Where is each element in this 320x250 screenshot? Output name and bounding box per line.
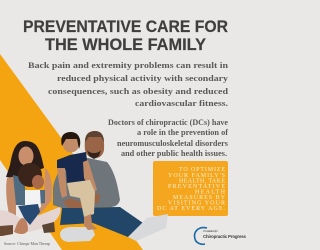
intro paragraph: reduced physical activity with secondary bbox=[57, 73, 229, 83]
intro paragraph: Back pain and extremity problems can result in bbox=[28, 60, 228, 70]
callout box: HEALTH, TAKE bbox=[179, 178, 225, 184]
woman bbox=[0, 141, 61, 236]
family photo bbox=[0, 131, 168, 242]
intro paragraph bbox=[28, 60, 229, 108]
callout box: PREVENTATIVE bbox=[168, 184, 225, 190]
second paragraph: a role in the prevention of bbox=[137, 127, 228, 137]
callout box: TO OPTIMIZE bbox=[179, 167, 225, 173]
callout box: HEALTH bbox=[195, 190, 226, 196]
logo: Foundation for Chiropractic Progress bbox=[195, 228, 247, 244]
callout box: VISITING YOUR bbox=[168, 200, 225, 206]
second paragraph: and other public health issues. bbox=[121, 148, 227, 158]
title bbox=[23, 18, 228, 54]
intro paragraph: cardiovascular fitness. bbox=[135, 98, 228, 108]
callout box: MEASURES BY bbox=[173, 195, 226, 201]
second paragraph: Doctors of chiropractic (DCs) have bbox=[108, 117, 228, 127]
logo: Foundation for Chiropractic Progress: Chiropractic Progress bbox=[203, 234, 247, 239]
callout box bbox=[153, 161, 228, 216]
second paragraph: neuromusculoskeletal disorders bbox=[117, 138, 229, 148]
title: THE WHOLE FAMILY bbox=[45, 36, 206, 54]
callout box: DC AT EVERY AGE. bbox=[157, 206, 226, 212]
curly-haired child bbox=[14, 163, 44, 234]
second paragraph bbox=[108, 117, 229, 158]
source note: Source: Chiropr Man Therap bbox=[4, 241, 50, 246]
logo: Foundation for Chiropractic Progress: Foundation for bbox=[202, 229, 219, 233]
title: PREVENTATIVE CARE FOR bbox=[23, 18, 228, 36]
intro paragraph: consequences, such as obesity and reduced bbox=[48, 86, 228, 96]
boy bbox=[57, 132, 97, 230]
man bbox=[53, 131, 168, 242]
callout box: YOUR FAMILY'S bbox=[168, 173, 225, 179]
orange diagonal band bbox=[0, 54, 143, 250]
